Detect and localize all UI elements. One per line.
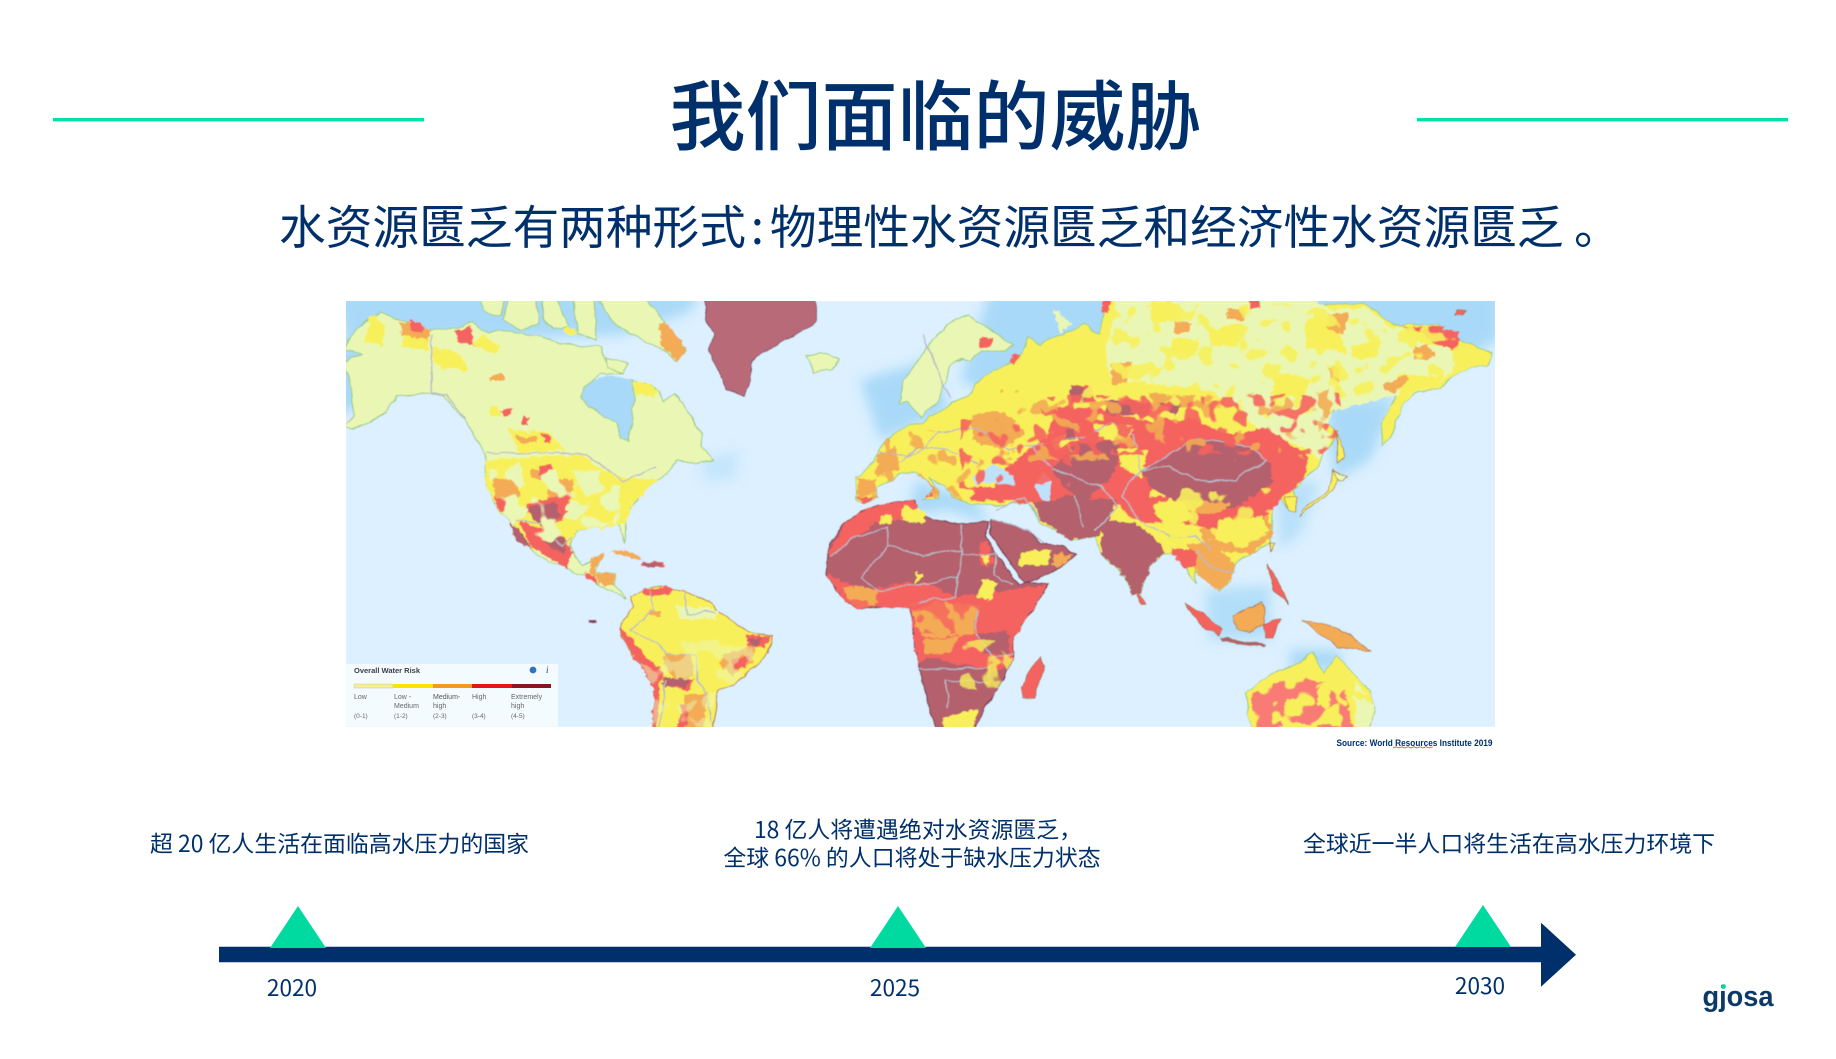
- legend labels: Medium: [394, 703, 419, 710]
- legend labels: (0-1): [354, 713, 368, 720]
- note 2025: [723, 811, 1101, 873]
- mosaic: Africa: [840, 600, 1020, 690]
- Eurasia, Africa, Australia: [826, 293, 1491, 737]
- South America land: [621, 585, 772, 737]
- marker 2020: [270, 906, 326, 948]
- note 2030: 全球近一半人口将生活在高水压力环境下: [1303, 825, 1715, 859]
- legend info glyph: i: [546, 665, 549, 675]
- legend title: Overall Water Risk: [354, 666, 421, 675]
- orange patches: [857, 307, 1433, 593]
- legend icons: [530, 667, 536, 673]
- marker 2030: [1455, 905, 1511, 947]
- map legend: [346, 664, 558, 726]
- mosaic: Australia: [1247, 677, 1374, 727]
- world water risk map: [330, 290, 1500, 737]
- year 2025: 2025: [870, 970, 920, 1003]
- year 2020: 2020: [267, 970, 317, 1003]
- Australia zones: [1250, 677, 1354, 727]
- Africa zones: [826, 501, 1048, 673]
- yellow north islands: [1150, 301, 1478, 402]
- timeline arrow: [219, 923, 1576, 987]
- ocean: [346, 301, 1496, 727]
- North America land: [344, 313, 713, 598]
- yellow gaps inside the red zone: [1052, 423, 1270, 547]
- year 2030: 2030: [1455, 968, 1505, 1001]
- legend labels: (1-2): [394, 713, 408, 720]
- title: 我们面临的威胁: [670, 56, 1202, 166]
- inland seas: [972, 463, 1052, 500]
- mosaic: Americas: [490, 470, 620, 540]
- map source: Source: World Resources Institute 2019: [1336, 738, 1492, 749]
- Americas: [344, 293, 839, 737]
- subtitle: 水资源匮乏有两种形式:物理性水资源匮乏和经济性水资源匮乏 。: [279, 191, 1621, 258]
- legend labels: Low: [354, 694, 368, 701]
- shallow seas: [330, 290, 1500, 670]
- note 2020: 超 20 亿人生活在面临高水压力的国家: [150, 825, 529, 859]
- national borders: Americas: [431, 333, 717, 727]
- gjosa logo: gjosa: [1702, 981, 1774, 1013]
- legend labels: (4-5): [511, 713, 525, 720]
- legend labels: Low -: [394, 694, 412, 701]
- Asian islands: [1021, 310, 1466, 698]
- Scandinavia: [900, 315, 1013, 418]
- note 2025: 18 亿人将遭遇绝对水资源匮乏，: [754, 811, 1082, 845]
- Australia land: [1246, 653, 1375, 737]
- legend labels: Extremely: [511, 694, 543, 701]
- left title rule: [53, 118, 424, 121]
- legend labels: (2-3): [433, 713, 447, 720]
- legend labels: high: [511, 703, 524, 710]
- legend scale: [354, 684, 551, 688]
- marker 2025: [870, 906, 926, 948]
- right title rule: [1417, 118, 1788, 121]
- darkest risk zones Asia: [1032, 383, 1273, 597]
- arctic Canada islands: [480, 293, 839, 373]
- Africa land: [826, 501, 1050, 737]
- legend labels: [354, 694, 543, 720]
- national borders: Old World: [830, 333, 1266, 707]
- pale north: [1056, 297, 1456, 460]
- Eurasia land: [854, 293, 1491, 597]
- Galapagos: [589, 620, 596, 623]
- legend labels: high: [433, 703, 446, 710]
- note 2025: 全球 66% 的人口将处于缺水压力状态: [723, 839, 1101, 873]
- legend labels: Medium-: [433, 694, 461, 701]
- Greenland: [704, 293, 816, 396]
- Hudson Bay: [580, 375, 635, 440]
- North America risk patches: [363, 317, 686, 585]
- legend labels: High: [472, 694, 487, 701]
- mosaic: north Asia: [850, 305, 1490, 540]
- legend labels: (3-4): [472, 713, 486, 720]
- land and risk layers: [344, 293, 1491, 737]
- South America risk patches: [621, 587, 771, 737]
- red patches: [855, 297, 1458, 567]
- Arabia land: [990, 520, 1075, 585]
